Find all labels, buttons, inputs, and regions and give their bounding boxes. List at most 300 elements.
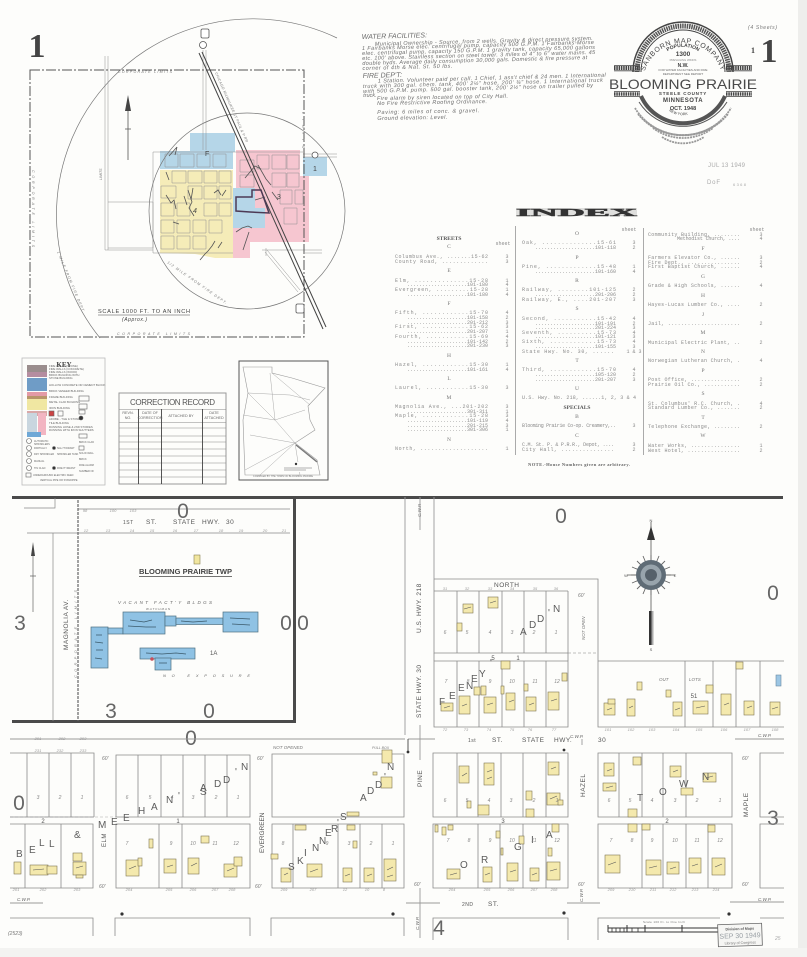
street name labels: EVERGREEN bbox=[259, 812, 266, 853]
index: specials column: Jail, ...................... bbox=[648, 321, 740, 327]
inset street label: 30 bbox=[226, 519, 234, 526]
inset registration numerals: 3 bbox=[105, 700, 117, 723]
index: streets column: Evergreen, .........15-28 bbox=[395, 287, 488, 293]
state outline bbox=[243, 367, 325, 475]
high fire limits outline bbox=[236, 190, 269, 213]
key symbol labels: FIRE HYDRANT bbox=[57, 467, 76, 470]
lot numbers: 2 bbox=[695, 798, 699, 804]
index: streets and specials column: 4 bbox=[632, 316, 636, 322]
index: streets column: H bbox=[447, 353, 451, 359]
street width dimensions: 60' bbox=[414, 882, 422, 888]
lot numbers: 1 bbox=[556, 798, 559, 804]
index: specials column: 2 bbox=[759, 302, 763, 308]
index: specials column: 2 bbox=[759, 260, 763, 266]
key symbol labels: TIN CLAD bbox=[34, 467, 46, 470]
block numbers: 1 bbox=[176, 819, 180, 825]
paving notes C.W.P.: C.W.P. bbox=[579, 888, 584, 902]
index: specials column: 2 bbox=[759, 377, 763, 383]
index: streets column: 1 bbox=[505, 409, 509, 415]
lot numbers: 10 bbox=[509, 679, 515, 685]
index: streets column: N bbox=[447, 437, 451, 443]
lot numbers: 6 bbox=[608, 798, 611, 804]
house numbers along blocks: 33 bbox=[488, 586, 493, 591]
index: streets column: ....................201-230 bbox=[407, 343, 488, 349]
lot numbers: 9 bbox=[651, 838, 654, 844]
index: streets column: ....................101-161 bbox=[407, 367, 488, 373]
house numbers along blocks: 212 bbox=[669, 887, 677, 892]
lot annotations: NOT OPENED bbox=[273, 745, 304, 750]
key symbol labels: PARTIALLY bbox=[34, 447, 47, 450]
index: specials column: W bbox=[700, 433, 706, 439]
compass rose bbox=[624, 518, 677, 652]
water facilities and fire department notes: Fire alarm by siren located on top of City Hall. bbox=[377, 94, 508, 102]
lot numbers: 11 bbox=[532, 679, 538, 685]
street name labels: ST. bbox=[492, 737, 503, 744]
house numbers along blocks: 31 bbox=[443, 586, 447, 591]
index: streets column: Fifth, ............15-70 bbox=[395, 310, 488, 316]
index: streets column bbox=[395, 236, 511, 452]
index: specials column: 4 bbox=[759, 236, 763, 242]
index: streets and specials column: S bbox=[575, 306, 579, 312]
inset street label: 1ST bbox=[123, 520, 134, 526]
index: specials column: G bbox=[701, 274, 705, 280]
label: vacant factory buildings: WATCHMAN bbox=[146, 607, 171, 611]
index: streets and specials column: 2 bbox=[632, 292, 636, 298]
index: streets and specials column: sheet bbox=[621, 227, 637, 233]
lot numbers: 1 bbox=[237, 795, 240, 801]
house numbers along blocks: 12 bbox=[343, 887, 348, 892]
key descriptions: FIRE WALLS (STONE) bbox=[49, 364, 78, 368]
correction record grid bbox=[119, 410, 226, 477]
index: streets column: ....................301-306 bbox=[407, 427, 488, 433]
index: streets and specials column: 2 bbox=[632, 287, 636, 293]
key descriptions: RUNNING HOSE & 2ND STORIES bbox=[49, 425, 93, 429]
sheet number top right bbox=[751, 33, 778, 70]
water facilities and fire department notes: WATER FACILITIES: bbox=[362, 32, 427, 41]
house numbers along blocks: 204 bbox=[125, 887, 133, 892]
index: streets and specials column: T bbox=[575, 358, 579, 364]
seal: population: N.W. bbox=[678, 63, 689, 69]
index: streets column: Laurel, ...........15-30 bbox=[395, 385, 488, 391]
index: streets column: 3 bbox=[505, 324, 509, 330]
index: streets and specials column: 2 bbox=[632, 321, 636, 327]
index: streets and specials column: Blooming Prairie Co-op. Creamery,.. bbox=[522, 423, 616, 429]
index: streets and specials column: Second, ...........15-42 bbox=[522, 316, 616, 322]
seal: population bbox=[658, 43, 708, 76]
index: streets and specials column: 3 bbox=[632, 344, 636, 350]
lot numbers: 12 bbox=[717, 838, 723, 844]
lot numbers: 5 bbox=[466, 630, 469, 636]
lot numbers: 11 bbox=[212, 841, 218, 847]
index: streets and specials column: 4 bbox=[632, 367, 636, 373]
index: streets and specials column: ....................105-120 bbox=[535, 372, 616, 378]
seal: county state date: OCT. 1948 bbox=[670, 106, 696, 112]
index: streets and specials column: State Hwy. No. 30, ...... bbox=[522, 349, 614, 355]
house numbers along blocks: 206 bbox=[507, 887, 515, 892]
street name labels: PINE bbox=[417, 770, 424, 787]
index: streets and specials column: 1 & 3 bbox=[626, 349, 642, 355]
lot numbers: 8 bbox=[468, 838, 471, 844]
inset house numbers: 19 bbox=[239, 528, 244, 533]
house numbers along blocks: 214 bbox=[712, 887, 720, 892]
index: streets and specials column: Pine, .............15-48 bbox=[522, 264, 616, 270]
locator map of Minnesota bbox=[239, 361, 328, 480]
inset house numbers: 20 bbox=[262, 528, 268, 533]
lot annotations: PULL BOX bbox=[372, 746, 390, 750]
red fire marker bbox=[150, 657, 154, 661]
inset street label: STATE bbox=[173, 519, 196, 526]
index: streets column: County Road, ............. bbox=[395, 259, 488, 265]
index: streets and specials column: ....................101-191 bbox=[535, 321, 616, 327]
lot numbers: 2 bbox=[532, 798, 536, 804]
inset: Blooming Prairie Township bbox=[14, 498, 292, 723]
key descriptions: STONE BUILDING bbox=[49, 376, 73, 380]
house numbers along blocks: 204 bbox=[448, 887, 456, 892]
index: streets column: 1 bbox=[505, 362, 509, 368]
lot numbers: 9 bbox=[489, 679, 492, 685]
paving notes C.W.P.: C.W.P. bbox=[758, 897, 772, 902]
seal: county state date bbox=[659, 91, 707, 112]
house numbers along blocks: 105 bbox=[696, 727, 703, 732]
block numbers: 2 bbox=[41, 819, 45, 825]
house numbers along blocks: 208 bbox=[550, 887, 558, 892]
inset registration numerals: 0 bbox=[203, 700, 215, 723]
one mile radius arc bbox=[56, 19, 337, 338]
factory buildings (blue) bbox=[91, 612, 258, 670]
index: specials column: 1 bbox=[759, 443, 763, 449]
sheet number top right: 1 bbox=[751, 46, 755, 55]
hand lettered addition names: ADD'N bbox=[520, 604, 560, 638]
house numbers along blocks: 210 bbox=[628, 887, 636, 892]
water facilities and fire department notes: elec. centrifugal pump, capacity 150 G.P.M. 1 gravity tank, capacity 65,000 gallons bbox=[362, 45, 595, 57]
index: specials column: 4 bbox=[759, 264, 763, 270]
Sanborn seal title block bbox=[609, 21, 757, 144]
street name labels bbox=[102, 582, 750, 908]
key descriptions: HOLLOW CONCRETE OR CEMENT BLOCK bbox=[49, 383, 105, 387]
key symbol labels: FIRE ALARM bbox=[79, 464, 94, 467]
paving notes C.W.P.: C.W.P. bbox=[570, 734, 584, 739]
inset house numbers: 13 bbox=[106, 528, 111, 533]
factory building scribbles bbox=[95, 618, 250, 663]
key map labels: CHICAGO MILWAUKEE ST PAUL & P RR bbox=[214, 72, 249, 143]
house numbers along blocks: 205 bbox=[165, 887, 173, 892]
key symbol labels: MANUAL bbox=[34, 460, 45, 463]
water facilities and fire department notes: etc. 100' above. Stainless section on steel tower. 3 miles of 4" to 6" water mains. 45 bbox=[362, 50, 596, 62]
index: specials column: Standard Lumber Co., ....... bbox=[648, 405, 740, 411]
key map zone numbers: 4 bbox=[193, 208, 197, 215]
key descriptions: BRICK BUILDING WITH bbox=[49, 373, 79, 377]
key map labels: CORPORATE LIMITS bbox=[118, 70, 173, 74]
lot numbers: 3 bbox=[192, 795, 195, 801]
right registration numeral by inset: 0 bbox=[297, 612, 309, 635]
index: streets and specials column: 2 bbox=[632, 372, 636, 378]
index: streets column: 3 bbox=[505, 385, 509, 391]
scale caption bbox=[98, 309, 190, 323]
scale caption: SCALE 1000 FT. TO AN INCH bbox=[98, 309, 190, 315]
index: specials column: H bbox=[701, 293, 705, 299]
inset street label: ST. bbox=[146, 519, 157, 526]
yellow frame dwellings bbox=[14, 597, 780, 882]
correction record column headers: NO. bbox=[125, 416, 131, 420]
index: streets and specials column: ....................101-155 bbox=[535, 344, 616, 350]
house numbers along blocks: 108 bbox=[772, 727, 779, 732]
key symbols bbox=[26, 396, 89, 477]
street width dimensions: 60' bbox=[578, 593, 586, 599]
correction record column headers: ATTACHED bbox=[204, 416, 224, 420]
index: specials column: Norwegian Lutheran Church, . bbox=[648, 358, 740, 364]
block outlines: middle row bbox=[10, 753, 784, 817]
house numbers along blocks: 205 bbox=[483, 887, 491, 892]
inset house numbers: 18 bbox=[219, 528, 224, 533]
index: specials column: 2 bbox=[759, 448, 763, 454]
key swatches bbox=[27, 365, 47, 437]
library of congress stamp bbox=[718, 923, 762, 947]
house numbers along blocks: 203 bbox=[73, 887, 81, 892]
lot numbers: 4 bbox=[488, 798, 491, 804]
house numbers along blocks: 233 bbox=[79, 748, 87, 753]
house numbers along blocks: 73 bbox=[464, 727, 469, 732]
inset street lines bbox=[24, 498, 290, 721]
key symbol labels: BRICK CLAD bbox=[79, 441, 94, 444]
index: streets column: C bbox=[447, 244, 451, 250]
lot numbers: 12 bbox=[233, 841, 239, 847]
index: specials column: 4 bbox=[759, 401, 763, 407]
key map labels: LIMITS bbox=[99, 168, 103, 180]
house numbers along blocks: 10 bbox=[365, 887, 370, 892]
index: specials column: 2 bbox=[759, 424, 763, 430]
label: 1A: 1A bbox=[210, 651, 217, 657]
index: specials column bbox=[648, 227, 765, 454]
key map zone numbers: 3 bbox=[277, 194, 281, 201]
seal: New York: NEW YORK bbox=[669, 109, 688, 116]
index: streets and specials column: B bbox=[575, 414, 579, 420]
index: streets and specials column: U bbox=[575, 386, 579, 392]
key symbol labels: DRY SPRINKLER bbox=[34, 453, 54, 456]
key map labels: CORPORATE LIMITS bbox=[31, 170, 35, 248]
index: streets and specials column: ....................101-118 bbox=[535, 245, 616, 251]
index: specials column: 4 bbox=[759, 283, 763, 289]
index: streets and specials column: C.M. St. P. & P.R.R., Depot, .... bbox=[522, 442, 614, 448]
house numbers along blocks: 34 bbox=[510, 586, 515, 591]
index: streets and specials column: ....................201-207 bbox=[535, 377, 616, 383]
index: streets and specials column: 3 bbox=[632, 325, 636, 331]
locator caption: COMPILED BY THE TOWN OF BLOOMING PRAIRIE bbox=[253, 475, 313, 478]
street width dimensions bbox=[99, 593, 750, 890]
house numbers along blocks: 36 bbox=[554, 586, 559, 591]
lot numbers: 1 bbox=[81, 795, 84, 801]
index: specials column: Water Works, ............... bbox=[648, 443, 740, 449]
street width dimensions: 60' bbox=[99, 884, 107, 890]
house numbers along blocks bbox=[12, 586, 779, 892]
inset house numbers: 14 bbox=[130, 528, 135, 533]
index: streets and specials column: 3 bbox=[632, 442, 636, 448]
key map zone numbers bbox=[193, 151, 317, 215]
street width dimensions: 60' bbox=[742, 756, 750, 762]
index heading: INDEX bbox=[516, 207, 637, 219]
hand lettered addition names: ADD'N bbox=[200, 762, 248, 794]
dwelling interior marks bbox=[33, 601, 778, 877]
lot numbers: 3 bbox=[510, 798, 513, 804]
house numbers along blocks: 202 bbox=[39, 887, 47, 892]
index: streets and specials column: O bbox=[575, 231, 579, 237]
house numbers along blocks: 207 bbox=[211, 887, 219, 892]
hand lettered addition names: FEENEY' bbox=[439, 658, 492, 708]
key map labels: 1 MILE FROM FIRE DEPT. bbox=[56, 251, 86, 313]
correction record column headers bbox=[122, 411, 224, 420]
index: streets column: First, ............15-62 bbox=[395, 324, 488, 330]
plate divider and inset frame bbox=[12, 497, 783, 722]
street width dimensions: 60' bbox=[578, 882, 586, 888]
seal: county state date: STEELE COUNTY bbox=[659, 91, 707, 96]
correction record column headers: ATTACHED BY bbox=[168, 414, 194, 418]
main map registration numerals: 4 bbox=[433, 917, 445, 940]
house numbers along blocks: 202 bbox=[58, 736, 66, 741]
index: streets and specials column: 3 bbox=[632, 297, 636, 303]
inset house numbers: 100 bbox=[110, 508, 117, 513]
lot numbers: 10 bbox=[190, 841, 196, 847]
index heading bbox=[516, 207, 637, 219]
street name labels: ELM bbox=[102, 833, 108, 847]
label: vacant factory buildings bbox=[118, 600, 212, 611]
house numbers along blocks: 232 bbox=[56, 748, 64, 753]
inset street label bbox=[123, 519, 234, 526]
house numbers along blocks: 208 bbox=[228, 887, 236, 892]
house numbers along blocks: 213 bbox=[691, 887, 699, 892]
inset registration numerals: 0 bbox=[177, 500, 189, 523]
seal fine print fan bbox=[635, 108, 731, 143]
lot numbers: 8 bbox=[631, 838, 634, 844]
lot numbers: 6 bbox=[444, 630, 447, 636]
key symbol labels: SGL HYDRANT bbox=[57, 447, 75, 450]
key descriptions: ADOBE - TILE & STONE bbox=[49, 417, 80, 421]
index: streets and specials column: ....................201-206 bbox=[535, 292, 616, 298]
water facilities and fire department notes: truck with 300 gal. chem. tank, 400' 2½" hose, 200' ¾" hose. 1 International truck bbox=[363, 77, 603, 90]
inset house numbers: 12 bbox=[84, 528, 89, 533]
index: streets column: E bbox=[447, 268, 451, 274]
index: specials column: 2 bbox=[759, 405, 763, 411]
key descriptions bbox=[49, 364, 105, 432]
index: specials column: Hayes-Lucas Lumber Co., .... bbox=[648, 302, 740, 308]
key descriptions: FIRE WALLS (WOOD) bbox=[49, 370, 77, 374]
key symbol labels: BRICK bbox=[79, 458, 87, 461]
index: specials column: Prairie Oil Co., ........... bbox=[648, 382, 740, 388]
correction record column headers: REVN. bbox=[122, 411, 134, 415]
index: streets column: 3 bbox=[505, 413, 509, 419]
key map labels bbox=[31, 70, 305, 336]
lot numbers: 8 bbox=[467, 679, 470, 685]
index: streets column: 4 bbox=[505, 418, 509, 424]
index: streets column: M bbox=[447, 395, 452, 401]
water facilities and fire department notes: corner of 4th & Nat. St. 50 lbs. bbox=[362, 64, 453, 72]
received date stamp: JUL 13 1949 bbox=[708, 163, 746, 169]
highway shields bbox=[200, 29, 318, 313]
index: streets and specials column: Sixth, ............15-73 bbox=[522, 339, 616, 345]
lot numbers: 6 bbox=[444, 798, 447, 804]
hand lettered addition names: MEEHAN'S bbox=[98, 787, 207, 831]
index: streets column: ....................101-119 bbox=[407, 418, 488, 424]
lot numbers: 1 bbox=[719, 798, 722, 804]
index note: NOTE.-House Numbers given are arbitrary. bbox=[528, 462, 630, 467]
lot numbers: 5 bbox=[149, 795, 152, 801]
paving notes C.W.P.: C.W.P. bbox=[17, 897, 31, 902]
lot numbers: 2 bbox=[532, 630, 536, 636]
index: streets and specials column: 4 bbox=[632, 269, 636, 275]
inset house numbers: 15 bbox=[150, 528, 155, 533]
inset north arrow bbox=[30, 542, 36, 612]
house numbers along blocks: 104 bbox=[673, 727, 680, 732]
scale label: Scale 100 Ft. to One Inch bbox=[643, 920, 685, 924]
seal: population: POPULATION bbox=[666, 43, 700, 52]
index: streets column: F bbox=[447, 301, 451, 307]
inset house numbers: 98 bbox=[83, 508, 88, 513]
water facilities and fire department notes: with 500 G.P.M. pump. 500 gal. booster tank, 200' 2½" hose on trailer pulled by bbox=[363, 82, 594, 95]
index: specials column: Post Office, ............... bbox=[648, 377, 740, 383]
seal side bands bbox=[614, 66, 752, 96]
lot numbers: 7 bbox=[447, 838, 450, 844]
house numbers along blocks: 35 bbox=[533, 586, 538, 591]
main map registration numerals bbox=[13, 505, 779, 940]
inset house numbers: 17 bbox=[194, 528, 199, 533]
key descriptions: FRAME BUILDING bbox=[49, 395, 73, 399]
lot numbers: 8 bbox=[282, 841, 285, 847]
lot numbers: 12 bbox=[554, 679, 560, 685]
street width dimensions: 60' bbox=[257, 756, 265, 762]
house numbers along blocks: 207 bbox=[309, 887, 317, 892]
lot numbers: 5 bbox=[466, 798, 469, 804]
lot numbers: 9 bbox=[170, 841, 173, 847]
label: no exposure: NO EXPOSURE bbox=[163, 673, 250, 678]
index: streets and specials column: ....................101-121 bbox=[535, 334, 616, 340]
index: streets column: STREETS bbox=[437, 236, 461, 242]
water facilities and fire department notes: FIRE DEP'T: bbox=[363, 72, 402, 80]
index: streets column: 3 bbox=[505, 259, 509, 265]
lot annotations: NOT OPEN bbox=[581, 616, 586, 640]
lot numbers: 3 bbox=[37, 795, 40, 801]
key title: KEY bbox=[56, 361, 72, 369]
street name labels: U.S. HWY. 218 bbox=[416, 583, 423, 633]
hand lettered addition names: TOWN bbox=[637, 772, 709, 804]
index: specials column: West Hotel, ................ bbox=[648, 448, 740, 454]
lot numbers: 2 bbox=[214, 795, 218, 801]
inset avenue label: MAGNOLIA AV. bbox=[63, 599, 70, 650]
house numbers along blocks: 207 bbox=[530, 887, 538, 892]
lot numbers: 7 bbox=[445, 679, 448, 685]
index: streets column: 1 bbox=[505, 446, 509, 452]
seal: company name: SANBORN MAP COMPANY bbox=[640, 38, 726, 70]
index: streets and specials column: 3 bbox=[632, 240, 636, 246]
index: specials column: T bbox=[701, 415, 705, 421]
library of congress stamp: SEP 30 1949 bbox=[719, 932, 761, 941]
correction record title: CORRECTION RECORD bbox=[130, 398, 215, 407]
corner mark: 25 bbox=[774, 936, 781, 942]
seal: county state date: MINNESOTA bbox=[663, 98, 703, 104]
house numbers along blocks: 101 bbox=[605, 727, 611, 732]
seal: town name: BLOOMING PRAIRIE bbox=[609, 76, 757, 92]
index: streets column: 4 bbox=[505, 310, 509, 316]
key symbol labels: AUTOMATIC bbox=[34, 440, 49, 443]
index: streets and specials column: C bbox=[575, 433, 579, 439]
block numbers: 51 bbox=[691, 694, 698, 700]
water facilities and fire department notes: Municipal Ownership - Source, from 2 wells. Gravity & direct pressure system. bbox=[375, 36, 593, 48]
main map registration numerals: 0 bbox=[13, 792, 25, 815]
corporate limits boundary bbox=[30, 70, 304, 337]
index: streets and specials column: 3 bbox=[632, 334, 636, 340]
lot numbers: 1 bbox=[392, 841, 395, 847]
compass letters: W bbox=[624, 573, 628, 578]
index: streets and specials column: 3 bbox=[632, 423, 636, 429]
index: streets column: ....................101-142 bbox=[407, 339, 488, 345]
index: streets column: 2 bbox=[505, 339, 509, 345]
